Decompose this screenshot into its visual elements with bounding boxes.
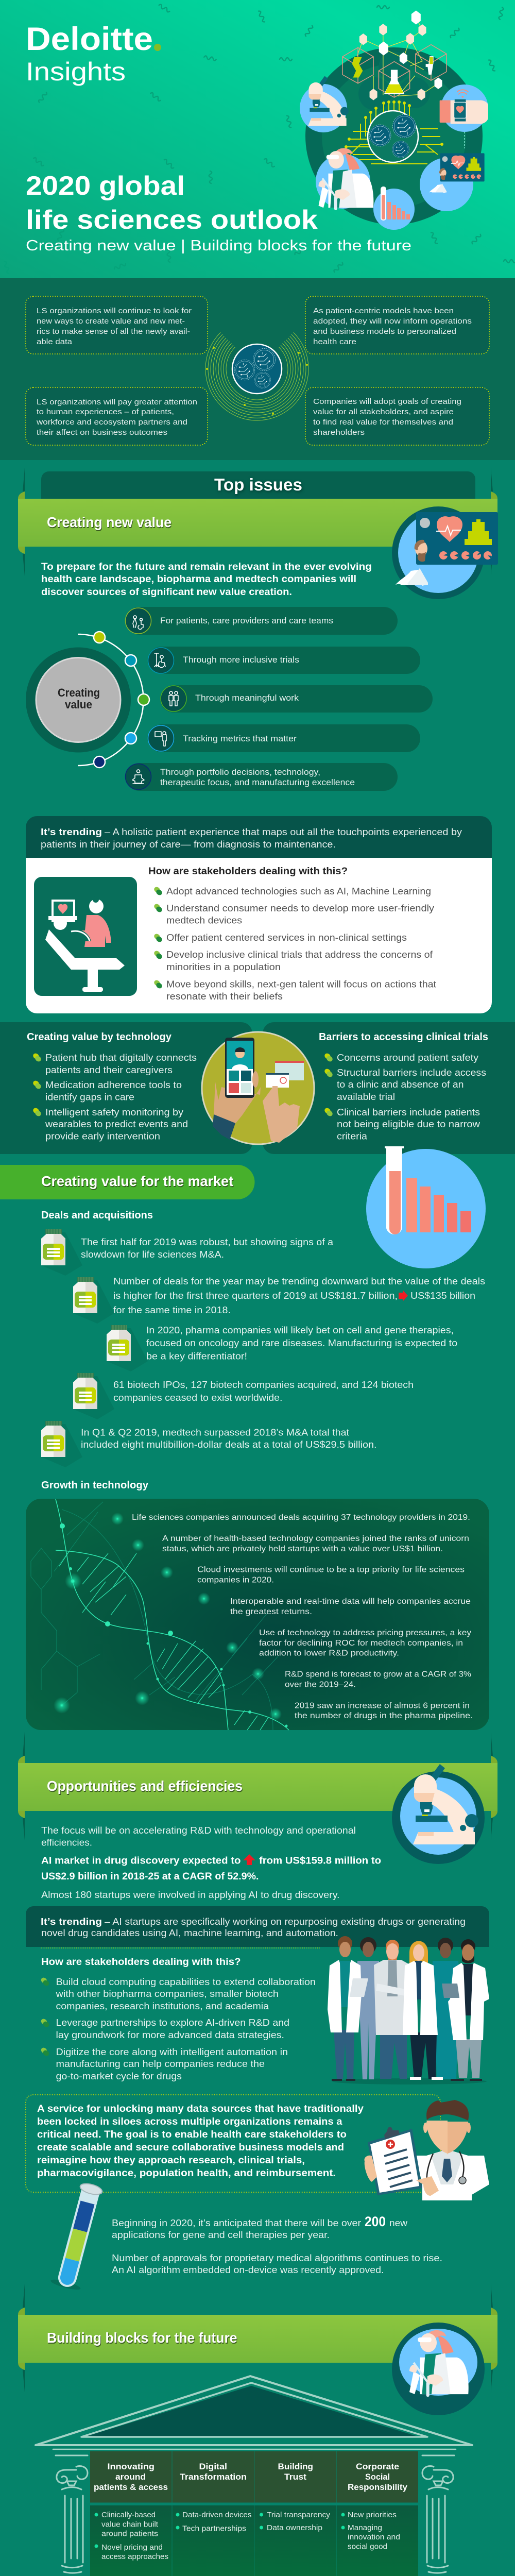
hero illustration bbox=[300, 10, 488, 230]
heading: deals and acquisitions: Deals and acquisitions bbox=[41, 1210, 153, 1221]
technology growth statements: factor for declining ROC for medtech companies, in bbox=[259, 1639, 463, 1648]
pill: patients: For patients, care providers and care teams bbox=[160, 616, 333, 625]
panel: creating value by technology: Patient hub that digitally connects bbox=[45, 1053, 197, 1063]
callout: unlocking data sources: critical need. The goal is to enable health care stakeholders to bbox=[37, 2129, 347, 2140]
stakeholder list: AI: lay groundwork for more advanced data strategies. bbox=[56, 2030, 284, 2040]
stakeholder list: resonate with their beliefs bbox=[166, 991, 283, 1002]
technology growth statements: Life sciences companies announced deals acquiring 37 technology providers in 2019. bbox=[132, 1513, 470, 1522]
pillar: corporate social responsibility: Corporate bbox=[356, 2462, 399, 2471]
callout: human experiences: to human experiences – of patients, bbox=[37, 408, 174, 416]
panel: growth in technology bbox=[26, 1499, 489, 1730]
pill: inclusive trials bbox=[148, 647, 420, 674]
scientist badge bbox=[316, 148, 373, 210]
pillar: corporate social responsibility: Responsibility bbox=[348, 2482, 408, 2492]
applications and approvals text: Beginning in 2020, it’s anticipated that there will be over bbox=[112, 2218, 361, 2228]
center circle: Creating bbox=[58, 686, 100, 699]
person three bbox=[374, 1940, 410, 2079]
technology growth statements: the number of drugs in the pharma pipeline. bbox=[295, 1711, 473, 1720]
section banner: creating value for the market bbox=[0, 1165, 254, 1199]
technology growth statements: Use of technology to address pricing pressures, a key bbox=[259, 1629, 471, 1637]
deal: value of deals: for the same time in 2018. bbox=[113, 1305, 231, 1315]
deal: value of deals bbox=[73, 1276, 485, 1324]
panel: it's trending AI startups: It’s trending bbox=[41, 1917, 102, 1927]
deal: value of deals: US$135 billion bbox=[410, 1291, 475, 1301]
applications and approvals text bbox=[112, 2214, 442, 2275]
applications and approvals text: An AI algorithm embedded on-device was recently approved. bbox=[112, 2265, 384, 2275]
stakeholder list: AI bbox=[40, 1957, 316, 2081]
stakeholder list: How are stakeholders dealing with this? bbox=[148, 866, 348, 877]
callout: new metrics: LS organizations will continue to look for bbox=[37, 307, 192, 315]
panel: it's trending patient experience bbox=[26, 816, 492, 1013]
stakeholder list: Adopt advanced technologies such as AI, Machine Learning bbox=[166, 886, 431, 896]
stakeholder list: AI: companies, research institutions, and academia bbox=[56, 2001, 269, 2011]
callout: unlocking data sources: pharmacovigilance, population health, and reimbursement. bbox=[37, 2168, 336, 2179]
stakeholder list bbox=[148, 866, 436, 1002]
pill: meaningful work: Through meaningful work bbox=[195, 693, 299, 703]
technology growth statements: addition to lower R&D productivity. bbox=[259, 1649, 399, 1658]
panel: creating value by technology: identify gaps in care bbox=[45, 1092, 134, 1103]
deal: cell and gene therapies: focused on oncology and rare diseases. Manufacturing is expected to bbox=[146, 1338, 457, 1348]
icon: patient care bbox=[34, 877, 137, 996]
pillar: digital transformation: Transformation bbox=[180, 2472, 247, 2482]
title: life sciences outlook bbox=[26, 205, 318, 235]
deal: biotech IPOs: companies ceased to exist worldwide. bbox=[113, 1393, 282, 1403]
pillar: corporate social responsibility: Social bbox=[365, 2472, 390, 2482]
arrow: up bbox=[243, 1854, 255, 1865]
pillar: innovating around patients: access approaches bbox=[101, 2552, 168, 2561]
panel: barriers to clinical trials: Barriers to accessing clinical trials bbox=[319, 1031, 488, 1043]
test tube chart badge bbox=[373, 187, 415, 230]
panel: creating value by technology bbox=[0, 1022, 252, 1154]
panel: barriers to clinical trials: Structural barriers include access bbox=[337, 1067, 486, 1078]
trending text bbox=[41, 827, 462, 850]
deal: biotech IPOs: 61 biotech IPOs, 127 biotech companies acquired, and 124 biotech bbox=[113, 1380, 414, 1390]
applications and approvals text: Number of approvals for proprietary medical algorithms continues to rise. bbox=[112, 2253, 442, 2263]
deal: cell and gene therapies bbox=[107, 1325, 457, 1371]
stakeholder list: AI: manufacturing can help companies reduce the bbox=[56, 2059, 265, 2069]
pillar: innovating around patients: Innovating bbox=[107, 2462, 154, 2471]
focus text: from US$159.8 million to bbox=[259, 1856, 381, 1866]
callout: patient-centric: adopted, they will now inform operations bbox=[313, 317, 472, 326]
analyst badge bbox=[420, 153, 485, 211]
technology growth statements: companies in 2020. bbox=[197, 1575, 274, 1585]
wearable badge bbox=[440, 84, 488, 132]
pillar: innovating around patients bbox=[90, 2451, 172, 2576]
stakeholder list: AI: Leverage partnerships to explore AI-driven R&D and bbox=[56, 2018, 289, 2028]
technology growth statements bbox=[132, 1513, 473, 1720]
pillar: innovating around patients: around bbox=[115, 2472, 146, 2482]
pillar: digital transformation bbox=[172, 2451, 254, 2576]
callout: unlocking data sources bbox=[26, 2095, 440, 2192]
icon: scientist bbox=[392, 2323, 485, 2415]
technology growth statements: the greatest returns. bbox=[230, 1607, 312, 1616]
person six bbox=[442, 1939, 489, 2078]
callout: human experiences bbox=[26, 387, 208, 445]
pillar: building trust: Trust bbox=[284, 2472, 306, 2482]
section banner: creating new value: Creating new value bbox=[47, 514, 171, 530]
deal: cell and gene therapies: In 2020, pharma companies will likely bet on cell and gene therapies, bbox=[146, 1325, 454, 1335]
subtitle: Creating new value | Building blocks for the future bbox=[26, 238, 411, 254]
focus text bbox=[41, 1825, 381, 1900]
applications and approvals text: 200 bbox=[365, 2214, 386, 2229]
header panel bbox=[0, 0, 515, 278]
trending text: – A holistic patient experience that maps out all the touchpoints experienced by bbox=[105, 827, 462, 837]
stakeholder list: AI: How are stakeholders dealing with this? bbox=[41, 1957, 241, 1968]
stakeholder list: medtech devices bbox=[166, 915, 242, 925]
callout: new metrics: rics to make sense of all the newly avail- bbox=[37, 327, 190, 336]
trending text: It’s trending bbox=[41, 827, 102, 837]
pillar: building trust: Data ownership bbox=[267, 2523, 322, 2532]
panel: barriers to clinical trials: not being eligible due to narrow bbox=[337, 1119, 480, 1129]
pill: metrics bbox=[148, 724, 420, 752]
trending text: patients in their journey of care— from diagnosis to maintenance. bbox=[41, 839, 336, 850]
circuit brain bbox=[346, 102, 442, 164]
focus text: US$2.9 billion in 2018-25 at a CAGR of 52.9%. bbox=[41, 1871, 259, 1882]
heading: top issues: Top issues bbox=[214, 475, 302, 494]
pill: meaningful work bbox=[160, 685, 433, 713]
deal: cell and gene therapies: be a key differentiator! bbox=[146, 1351, 247, 1361]
pill: metrics: Tracking metrics that matter bbox=[183, 734, 297, 743]
icon: microscope bbox=[392, 1764, 485, 1864]
technology growth statements: 2019 saw an increase of almost 6 percent in bbox=[295, 1701, 470, 1710]
technology growth statements: R&D spend is forecast to grow at a CAGR of 3% bbox=[285, 1670, 471, 1679]
callout: unlocking data sources: A service for unlocking many data sources that have traditionally bbox=[37, 2104, 364, 2114]
pillar: innovating around patients: value chain built bbox=[101, 2520, 159, 2529]
pillar: innovating around patients: around patients bbox=[101, 2530, 158, 2538]
diagram: creating value bbox=[26, 607, 433, 791]
deal: medtech M&A: In Q1 & Q2 2019, medtech surpassed 2018’s M&A total that bbox=[81, 1427, 349, 1437]
illustration: test tube bbox=[50, 2181, 107, 2292]
logo: Deloitte Insights: Deloitte bbox=[26, 21, 153, 57]
stakeholder list: AI: go-to-market cycle for drugs bbox=[56, 2071, 182, 2081]
intro band bbox=[0, 278, 515, 460]
center circle bbox=[26, 647, 131, 752]
pillar: corporate social responsibility: Managing bbox=[348, 2523, 382, 2532]
section banner: opportunities and efficiencies: Opportunities and efficiencies bbox=[47, 1778, 243, 1794]
panel: creating value by technology: Creating value by technology bbox=[27, 1031, 172, 1043]
panel: creating value by technology: Intelligent safety monitoring by bbox=[45, 1107, 183, 1117]
dna helix illustration bbox=[31, 1499, 289, 1730]
pillar: building trust: Trial transparency bbox=[267, 2511, 331, 2519]
technology growth statements: status, which are privately held startups with a value over US$1 billion. bbox=[162, 1545, 443, 1553]
logo: Deloitte Insights: Insights bbox=[26, 57, 126, 86]
callout: patient-centric: health care bbox=[313, 337, 356, 346]
callout: stakeholders value: to find real value for themselves and bbox=[313, 418, 453, 427]
pillar: building trust: Building bbox=[278, 2462, 313, 2471]
stakeholder list: minorities in a population bbox=[166, 962, 281, 972]
pillar: digital transformation: Digital bbox=[199, 2462, 227, 2471]
heading: growth in technology: Growth in technology bbox=[41, 1480, 149, 1491]
arrow: right bbox=[399, 1290, 408, 1301]
technology growth statements: Interoperable and real-time data will help companies accrue bbox=[230, 1597, 471, 1606]
pill: portfolio: therapeutic focus, and manufacturing excellence bbox=[160, 777, 355, 787]
panel: barriers to clinical trials: Concerns around patient safety bbox=[337, 1053, 478, 1063]
callout: stakeholders value: value for all stakeholders, and aspire bbox=[313, 408, 454, 416]
technology growth statements: Cloud investments will continue to be a top priority for life sciences bbox=[197, 1565, 465, 1574]
section banner: creating new value bbox=[18, 468, 497, 576]
focus text: Almost 180 startups were involved in applying AI to drug discovery. bbox=[41, 1890, 340, 1900]
deal: H1 2019: slowdown for life sciences M&A. bbox=[81, 1249, 224, 1260]
deal: value of deals: Number of deals for the year may be trending downward but the value of the deals bbox=[113, 1276, 485, 1286]
icon: test tube bar chart bbox=[366, 1146, 486, 1268]
deal: value of deals: is higher for the first three quarters of 2019 at US$181.7 billion, bbox=[113, 1291, 398, 1301]
applications and approvals text: new bbox=[389, 2218, 408, 2228]
illustration: doctor with clipboard bbox=[364, 2100, 489, 2200]
stakeholder list: AI: Digitize the core along with intelligent automation in bbox=[56, 2047, 288, 2057]
applications and approvals text: applications for gene and cell therapies per year. bbox=[112, 2230, 330, 2240]
stakeholder list: AI: with other biopharma companies, smaller biotech bbox=[55, 1989, 279, 1999]
heading: top issues bbox=[41, 471, 475, 499]
panel: it's trending AI startups: novel drug candidates using AI, machine learning, and automation. bbox=[41, 1928, 338, 1938]
stakeholder list: Move beyond skills, next-gen talent will focus on actions that bbox=[166, 979, 436, 989]
panel: it's trending AI startups: – AI startups are specifically working on repurposing existing drugs or generating bbox=[105, 1917, 466, 1927]
panel: barriers to clinical trials: available trial bbox=[337, 1092, 395, 1102]
pillar: innovating around patients: patients & access bbox=[94, 2482, 168, 2492]
callout: patient-centric bbox=[305, 296, 489, 354]
pill: portfolio bbox=[126, 763, 398, 791]
stakeholder list: Offer patient centered services in non-clinical settings bbox=[166, 933, 407, 943]
icon: telehealth phone bbox=[202, 1032, 314, 1144]
pillar: building trust bbox=[254, 2451, 336, 2576]
intro statement: discover sources of significant new value creation. bbox=[41, 587, 292, 598]
section banner: opportunities and efficiencies bbox=[18, 1732, 497, 1840]
section banner: building blocks: Building blocks for the future bbox=[47, 2330, 237, 2346]
deal: H1 2019: The first half for 2019 was robust, but showing signs of a bbox=[81, 1237, 334, 1247]
pillar: digital transformation: Tech partnerships bbox=[182, 2524, 246, 2533]
panel: it's trending AI startups bbox=[26, 1906, 489, 1947]
deal: H1 2019 bbox=[41, 1229, 334, 1276]
pillar: corporate social responsibility: innovation and bbox=[348, 2533, 400, 2541]
pediment bbox=[36, 2376, 472, 2449]
panel: barriers to clinical trials: to a clinic and absence of an bbox=[337, 1079, 464, 1090]
person four bbox=[403, 1941, 438, 2079]
pill: inclusive trials: Through more inclusive trials bbox=[183, 655, 299, 665]
person one bbox=[328, 1936, 368, 2079]
callout: patient-centric: and business models to personalized bbox=[313, 327, 456, 336]
pillar: innovating around patients: Novel pricing and bbox=[101, 2543, 163, 2552]
title bbox=[26, 171, 318, 235]
pillar: corporate social responsibility bbox=[337, 2451, 418, 2576]
intro statement: To prepare for the future and remain relevant in the ever evolving bbox=[41, 562, 372, 572]
pillar: corporate social responsibility: social good bbox=[348, 2542, 387, 2551]
pillar: innovating around patients: Clinically-based bbox=[101, 2511, 156, 2519]
pill: patients bbox=[126, 607, 398, 635]
intro statement: health care landscape, biopharma and medtech companies will bbox=[41, 574, 356, 585]
panel: barriers to clinical trials: criteria bbox=[337, 1131, 368, 1142]
callout: new metrics bbox=[26, 296, 208, 354]
deal: biotech IPOs bbox=[73, 1373, 414, 1419]
diagram: temple of building blocks bbox=[36, 2376, 475, 2576]
microscope badge bbox=[300, 76, 349, 132]
panel: creating value by technology: Medication adherence tools to bbox=[45, 1080, 182, 1090]
section banner: building blocks bbox=[18, 2284, 497, 2392]
pillar: corporate social responsibility: New priorities bbox=[348, 2511, 397, 2519]
callout: new metrics: able data bbox=[37, 337, 73, 346]
callout: patient-centric: As patient-centric models have been bbox=[313, 307, 454, 315]
pill: portfolio: Through portfolio decisions, technology, bbox=[160, 767, 320, 777]
panel: barriers to clinical trials: Clinical barriers include patients bbox=[337, 1107, 480, 1117]
callout: unlocking data sources: create scalable and secure collaborative business models and bbox=[37, 2142, 344, 2153]
panel: creating value by technology: patients and their caregivers bbox=[45, 1065, 173, 1075]
callout: stakeholders value: Companies will adopt goals of creating bbox=[313, 397, 461, 406]
deal: medtech M&A bbox=[41, 1421, 377, 1467]
pillar: digital transformation: Data-driven devices bbox=[182, 2511, 251, 2519]
center circuit icon bbox=[205, 332, 308, 420]
stakeholder list: Develop inclusive clinical trials that address the concerns of bbox=[166, 950, 433, 960]
stakeholder list: Understand consumer needs to develop more user-friendly bbox=[166, 903, 434, 913]
center circle: value bbox=[65, 698, 92, 711]
stakeholder list: AI: Build cloud computing capabilities to extend collaboration bbox=[56, 1977, 316, 1987]
title: 2020 global bbox=[26, 171, 185, 201]
logo: Deloitte Insights bbox=[26, 21, 161, 86]
panel: creating value by technology: wearables to predict events and bbox=[45, 1119, 188, 1129]
callout: stakeholders value bbox=[305, 387, 489, 445]
back row bbox=[355, 1937, 461, 2079]
intro statement bbox=[41, 562, 372, 598]
callout: human experiences: their affect on business outcomes bbox=[37, 428, 167, 437]
callout: new metrics: new ways to create value and new met- bbox=[37, 317, 185, 326]
callout: unlocking data sources: been locked in siloes across multiple organizations remains a bbox=[37, 2116, 342, 2127]
panel: barriers to clinical trials bbox=[263, 1022, 515, 1154]
technology growth statements: over the 2019–24. bbox=[285, 1681, 356, 1689]
callout: stakeholders value: shareholders bbox=[313, 428, 365, 437]
focus text: AI market in drug discovery expected to bbox=[41, 1856, 241, 1866]
panel: creating value by technology: provide early intervention bbox=[45, 1131, 160, 1142]
callout: unlocking data sources: reimagine how they approach research, clinical trials, bbox=[37, 2155, 305, 2166]
focus text: The focus will be on accelerating R&D with technology and operational bbox=[41, 1825, 356, 1836]
illustration: medical team bbox=[328, 1936, 489, 2084]
technology growth statements: A number of health-based technology companies joined the ranks of unicorn bbox=[162, 1534, 469, 1543]
deal: medtech M&A: included eight multibillion-dollar deals at a total of US$29.5 billion. bbox=[81, 1439, 377, 1450]
icon: analyst with dashboard bbox=[392, 506, 498, 599]
callout: human experiences: workforce and ecosystem partners and bbox=[36, 418, 187, 427]
callout: human experiences: LS organizations will pay greater attention bbox=[37, 398, 197, 406]
focus text: efficiencies. bbox=[41, 1837, 92, 1848]
section banner: creating value for the market: Creating value for the market bbox=[41, 1173, 233, 1189]
